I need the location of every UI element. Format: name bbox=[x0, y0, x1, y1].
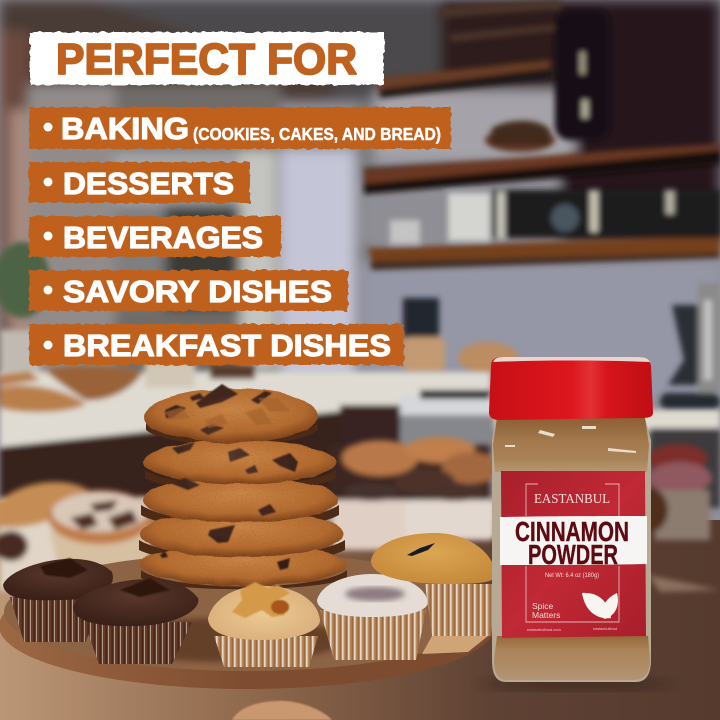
red label panel bbox=[501, 471, 646, 638]
wooden table bbox=[0, 500, 720, 720]
frosted muffin wrapper bbox=[320, 610, 426, 660]
list item: desserts bbox=[29, 162, 250, 203]
crumble topping bbox=[232, 582, 290, 618]
frosted muffin top bbox=[317, 574, 428, 617]
website: eastanbulfood.com bbox=[527, 627, 561, 632]
list item: savory dishes: SAVORY DISHES bbox=[63, 274, 332, 309]
cookie 4 bbox=[140, 511, 344, 557]
muffin wrapper 2 bbox=[84, 622, 192, 664]
list item: beverages bbox=[29, 216, 281, 257]
social handle: eastanbulfood bbox=[593, 627, 617, 631]
cookie 1 bbox=[144, 389, 318, 443]
blurred side pastries bbox=[0, 437, 720, 592]
product name line 1: CINNAMON bbox=[515, 516, 629, 547]
list item: desserts: DESSERTS bbox=[63, 166, 234, 201]
yellow muffin top bbox=[371, 533, 496, 584]
cap rim bbox=[493, 357, 650, 362]
heading: PERFECT FOR bbox=[56, 35, 357, 84]
tagline second line: Matters bbox=[532, 610, 560, 620]
cookie 3 bbox=[142, 477, 338, 523]
partial muffin at bottom bbox=[232, 701, 332, 720]
product name line 2: POWDER bbox=[528, 539, 618, 570]
counter and cabinets bbox=[0, 362, 720, 508]
white name band bbox=[500, 516, 647, 565]
title banner bbox=[30, 32, 384, 85]
jar highlights bbox=[505, 426, 636, 453]
yellow muffin bbox=[371, 533, 496, 636]
chocolate chunks bbox=[160, 384, 298, 570]
cookie 2 bbox=[144, 440, 336, 484]
list item: breakfast dishes: BREAKFAST DISHES bbox=[63, 328, 391, 363]
baked highlights bbox=[165, 398, 290, 428]
yellow muffin wrapper bbox=[425, 584, 496, 636]
spice jar bbox=[480, 357, 670, 691]
net weight: Net Wt: 6.4 oz (180g) bbox=[545, 572, 599, 579]
powder upper bbox=[493, 418, 649, 472]
powder lower bbox=[494, 636, 650, 680]
vanilla muffin top bbox=[208, 586, 320, 640]
jar shadow bbox=[480, 677, 670, 691]
tagline: Spice bbox=[532, 601, 554, 611]
jar upper body bbox=[492, 418, 651, 682]
cookie shadows bbox=[139, 423, 347, 589]
vanilla muffin bbox=[208, 582, 320, 667]
muffin top 1 bbox=[3, 559, 113, 600]
torn white strip bbox=[30, 32, 384, 85]
cookie 5 bbox=[141, 544, 347, 586]
chocolate muffins bbox=[3, 558, 198, 664]
vanilla muffin wrapper bbox=[214, 636, 318, 667]
frosted muffin bbox=[317, 574, 428, 660]
background shelves bbox=[0, 0, 720, 410]
list item: baking: BAKING bbox=[61, 111, 189, 146]
list item: baking bbox=[29, 107, 451, 149]
icon: leaves bbox=[582, 593, 618, 619]
list item: baking: (COOKIES, CAKES, AND BREAD) bbox=[193, 124, 441, 144]
list item: beverages: BEVERAGES bbox=[63, 220, 263, 255]
jar cap bbox=[489, 357, 653, 420]
label frame bbox=[526, 484, 619, 622]
wooden tray bbox=[0, 553, 495, 689]
muffin wrapper 1 bbox=[10, 597, 100, 642]
stack of cookies bbox=[139, 384, 347, 589]
brand name: EASTANBUL bbox=[534, 492, 610, 507]
muffin top 2 bbox=[73, 579, 198, 626]
list item: savory dishes bbox=[29, 270, 348, 311]
product label bbox=[500, 471, 647, 638]
